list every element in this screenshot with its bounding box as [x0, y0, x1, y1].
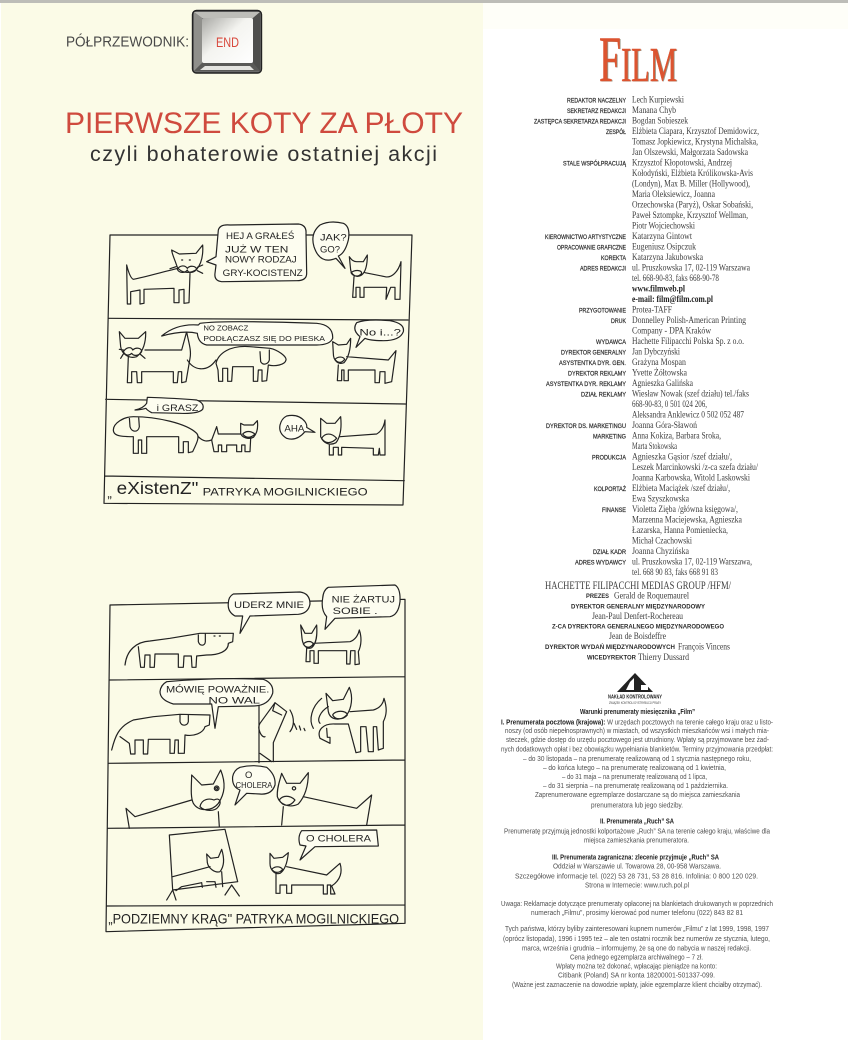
icon: END key: [192, 10, 262, 73]
speech bubble: [233, 766, 275, 805]
masthead: role labels: FINANSE: [602, 507, 626, 514]
masthead: names: Orzechowska (Paryż), Oskar Sobański,: [632, 199, 753, 210]
subscription terms text: Tych państwa, którzy byliby zainteresowani kupnem numerów „Filmu” z lat 1999, 1998, 1997: [505, 924, 769, 933]
speech bubble: NO WAL: [208, 696, 260, 706]
subscription terms text: noszy (od osób niepełnosprawnych) w miastach, od wszystkich mieszkańców wsi i małych mia-: [505, 726, 769, 735]
speech bubble: NO ZOBACZ: [203, 323, 249, 332]
masthead: role labels: PRZYGOTOWANIE: [579, 307, 626, 314]
publisher group block: Gerald de Roquemaurel: [614, 590, 689, 602]
subscription terms text: Prenumeratę przyjmują jednostki kolportażowe „Ruch” SA na terenie całego kraju, właściwe dla: [504, 826, 771, 835]
speech bubble: CHOLERA: [236, 781, 273, 790]
panel 2: punch: [112, 679, 386, 762]
panel 1: cat speaks: [127, 222, 401, 304]
masthead: names: ul. Pruszkowska 17, 02-119 Warszawa: [632, 262, 751, 273]
masthead: role labels: OPRACOWANIE GRAFICZNE: [557, 244, 626, 251]
subscription terms text: Szczegółowe informacje tel. (022) 53 28 731, 53 28 816. Infolinia: 0 800 120 029.: [515, 871, 758, 880]
subscription terms text: Oddział w Warszawie ul. Towarowa 28, 00-958 Warszawa.: [553, 862, 721, 871]
masthead: names: Tomasz Jopkiewicz, Krystyna Michalska,: [632, 136, 758, 147]
subscription terms text: steczek, gdzie dostęp do urzędu pocztowego jest utrudniony. Wpłaty są przyjmowane bez żad-: [506, 735, 769, 744]
masthead: names: tel. 668-90-83, faks 668-90-78: [632, 273, 719, 284]
subscription terms text: prenumeratora lub jego siedziby.: [591, 800, 683, 809]
masthead: role labels: DYREKTOR GENERALNY: [561, 349, 627, 356]
subscription terms text: – do końca lutego – na prenumeratę realizowaną od 1 kwietnia,: [543, 763, 726, 772]
masthead: names: www.filmweb.pl: [632, 283, 685, 294]
panel 3: o cholera: [126, 766, 372, 828]
speech bubble: O CHOLERA: [306, 834, 372, 844]
header: section label and END key: [66, 10, 262, 73]
publisher group block: DYREKTOR WYDAŃ MIĘDZYNARODOWYCH: [545, 642, 675, 651]
masthead: names: [632, 94, 759, 578]
publisher group block: Jean-Paul Denfert-Rochereau: [592, 611, 683, 622]
masthead: names: Agnieszka Galińska: [632, 378, 694, 389]
subscription terms text: Zaprenumerowane egzemplarze dostarczane są do miejsca zamieszkania: [535, 790, 741, 799]
publisher group block: Jean de Boisdeffre: [609, 631, 666, 642]
masthead: names: Donnelley Polish-American Printing: [632, 315, 746, 326]
subscription terms text: III. Prenumerata zagraniczna: zlecenie przyjmuje „Ruch” SA: [552, 852, 719, 861]
speech bubble: GRY-KOCISTENZ: [223, 268, 303, 278]
masthead: names: Joanna Góra-Sławoń: [632, 420, 697, 431]
masthead: names: tel. 668 90 83, faks 668 91 83: [632, 567, 718, 578]
subscription terms text: Strona w Internecie: www.ruch.pol.pl: [585, 880, 689, 889]
logo: FILM: F: [599, 24, 621, 96]
masthead: names: Joanna Karbowska, Witold Laskowski: [632, 472, 750, 483]
masthead: role labels: MARKETING: [593, 433, 626, 440]
speech bubble: [160, 679, 273, 728]
panel 2: cat plugged into dog: [119, 320, 403, 383]
masthead: names: Yvette Żółtowska: [632, 366, 688, 378]
masthead: role labels: KOREKTA: [601, 255, 627, 262]
masthead: names: Elżbieta Maciążek /szef działu/,: [632, 483, 730, 494]
caption: [107, 478, 368, 500]
masthead: names: Violetta Zięba /główna księgowa/,: [632, 504, 738, 515]
publisher group block: HACHETTE FILIPACCHI MEDIAS GROUP /HFM/: [545, 580, 732, 592]
masthead: names: Company - DPA Kraków: [632, 325, 711, 336]
masthead: role labels: WYDAWCA: [596, 339, 627, 346]
icon: circulation control seal: ZWIĄZEK KONTROLI DYSTRYBUCJI PRASY: [609, 701, 661, 705]
masthead: role labels: ASYSTENTKA DYR. GEN.: [559, 360, 626, 367]
masthead: role labels: SEKRETARZ REDAKCJI: [567, 108, 626, 115]
masthead: role labels: DZIAŁ REKLAMY: [581, 391, 627, 398]
speech bubble: i GRASZ: [157, 403, 199, 413]
caption: eXistenZ": [117, 478, 198, 498]
masthead: names: Lech Kurpiewski: [632, 94, 684, 105]
publisher group block: [545, 580, 732, 663]
masthead: names: Katarzyna Jakubowska: [632, 252, 704, 263]
speech bubble: GO?: [320, 244, 340, 254]
comic frame: [104, 235, 412, 505]
subscription terms text: nych dodatkowych opłat i bez obowiązku wypełniania blankietów. Terminy przyjmowania przedpłat:: [501, 745, 773, 754]
comic strip: eXistenZ: [104, 222, 412, 505]
publisher group block: WICEDYREKTOR: [587, 654, 636, 662]
speech bubble: NIE ŻARTUJ: [332, 594, 395, 604]
subscription terms text: numerach „Filmu”, prosimy kierować pod numer telefonu (022) 843 82 81: [531, 908, 743, 917]
logo: FILM: ILM: [621, 37, 677, 92]
subscription terms text: miejsca zamieszkania prenumeratora.: [584, 836, 689, 845]
masthead: names: Manana Chyb: [632, 105, 676, 116]
masthead: names: 668-90-83, 0 501 024 206,: [632, 399, 707, 410]
icon: END key: END: [216, 35, 239, 50]
speech bubble: [322, 585, 400, 629]
masthead: role labels: ZESPÓŁ: [606, 127, 626, 136]
masthead: role labels: DYREKTOR DS. MARKETINGU: [546, 423, 626, 430]
icon: circulation control seal: [608, 673, 663, 705]
subscription terms text: (oprócz listopada), 1996 i 1995 też – ale ten ostatni rocznik bez numerów ze stycznia, lutego,: [503, 934, 770, 943]
subscription terms text: Warunki prenumeraty miesięcznika „Film”: [580, 707, 695, 716]
subtitle: czyli bohaterowie ostatniej akcji: [90, 142, 437, 166]
masthead: role labels: ZASTĘPCA SEKRETARZA REDAKCJI: [534, 118, 626, 125]
publisher group block: François Vincens: [678, 642, 730, 652]
caption: „PODZIEMNY KRĄG" PATRYKA MOGILNICKIEGO: [108, 910, 399, 926]
masthead: role labels: DZIAŁ KADR: [593, 549, 626, 556]
subscription terms text: [501, 707, 773, 989]
publisher group block: Thierry Dussard: [638, 652, 689, 663]
masthead: role labels: DYREKTOR REKLAMY: [568, 370, 627, 377]
publisher group block: DYREKTOR GENERALNY MIĘDZYNARODOWY: [571, 604, 706, 610]
speech bubble: [313, 222, 349, 268]
icon: circulation control seal: NAKŁAD KONTROLOWANY: [608, 694, 663, 700]
masthead: names: Agnieszka Gąsior /szef działu/,: [632, 451, 732, 462]
masthead: names: e-mail: film@film.com.pl: [632, 294, 713, 305]
caption: PATRYKA MOGILNICKIEGO: [203, 486, 368, 498]
publisher group block: PREZES: [586, 593, 610, 600]
comic strip: Podziemny krąg: [106, 585, 405, 932]
masthead: names: Marzenna Maciejewska, Agnieszka: [632, 514, 743, 525]
masthead: role labels: ADRES WYDAWCY: [575, 559, 627, 566]
masthead: role labels: REDAKTOR NACZELNY: [567, 97, 627, 104]
panel 3: dog plays cat: [113, 397, 385, 455]
subscription terms text: – do 31 sierpnia – na prenumeratę realizowaną od 1 października.: [543, 781, 728, 790]
speech bubble: [207, 224, 307, 282]
speech bubble: MÓWIĘ POWAŻNIE.: [166, 685, 269, 695]
masthead: role labels: STALE WSPÓŁPRACUJĄ: [563, 158, 627, 167]
panel: cream left page: [1, 3, 483, 1040]
masthead: role labels: PRODUKCJA: [592, 454, 627, 461]
title: PIERWSZE KOTY ZA PŁOTY: [65, 107, 463, 140]
masthead: names: Jan Dybczyński: [632, 346, 680, 357]
speech bubble: JUŻ W TEN: [225, 244, 288, 254]
masthead: role labels: ADRES REDAKCJI: [580, 265, 626, 272]
masthead: role labels: KIEROWNICTWO ARTYSTYCZNE: [545, 234, 626, 241]
panel 1: dog and cat: [125, 585, 400, 667]
masthead: role labels: DRUK: [611, 318, 627, 325]
logo: FILM: [599, 24, 678, 96]
masthead: names: ul. Pruszkowska 17, 02-119 Warszawa,: [632, 556, 752, 567]
speech bubble: No i...?: [359, 327, 401, 337]
speech bubble: [162, 322, 333, 345]
masthead: names: Ewa Szyszkowska: [632, 493, 690, 504]
subscription terms text: II. Prenumerata „Ruch” SA: [600, 817, 674, 826]
subscription terms text: Cena jednego egzemplarza archiwalnego – 7 zł.: [570, 952, 703, 961]
speech bubble: [228, 592, 310, 633]
masthead: names: Piotr Wojciechowski: [632, 220, 695, 231]
speech bubble: AHA: [284, 424, 305, 434]
masthead: names: Wiesław Nowak (szef działu) tel./faks: [632, 388, 749, 399]
masthead: names: Aleksandra Anklewicz 0 502 052 487: [632, 409, 744, 420]
speech bubble: [355, 320, 403, 347]
comic frame: [106, 599, 405, 932]
speech bubble: O: [245, 770, 252, 780]
section label: PÓŁPRZEWODNIK:: [66, 34, 189, 51]
masthead: names: Anna Kokiza, Barbara Sroka,: [632, 430, 721, 441]
caption: „: [107, 485, 112, 500]
masthead: names: Katarzyna Gintowt: [632, 231, 692, 242]
masthead: role labels: [534, 97, 627, 566]
masthead: names: Eugeniusz Osipczuk: [632, 241, 696, 252]
masthead: names: Elżbieta Ciapara, Krzysztof Demidowicz,: [632, 126, 759, 137]
subscription terms text: Wpłaty można też dokonać, wpłacając pieniądze na konto:: [556, 961, 717, 970]
masthead: names: Grażyna Mospan: [632, 357, 686, 368]
speech bubble: [299, 830, 378, 860]
subscription terms text: (Ważne jest zaznaczenie na dowodzie wpłaty, jakie egzemplarze klient chciałby otrzymać).: [512, 980, 762, 989]
masthead: role labels: ASYSTENTKA DYR. REKLAMY: [546, 381, 627, 388]
masthead: names: Michał Czachowski: [632, 535, 692, 546]
subscription terms text: I. Prenumerata pocztowa (krajowa): W urzędach pocztowych na terenie całego kraju oraz u listo-: [501, 717, 773, 726]
masthead: names: Krzysztof Kłopotowski, Andrzej: [632, 157, 732, 168]
masthead: names: Leszek Marcinkowski /z-ca szefa działu/: [632, 462, 758, 473]
masthead: names: Paweł Sztompke, Krzysztof Wellman,: [632, 210, 748, 221]
masthead: names: Marta Stokowska: [632, 441, 677, 452]
subscription terms text: Citibank (Poland) SA nr konta 18200001-501337-099.: [558, 971, 715, 980]
masthead: names: Bogdan Sobieszek: [632, 115, 688, 126]
subscription terms text: marca, września i grudnia – informujemy, że są one do nabycia w naszej redakcji.: [522, 943, 751, 952]
speech bubble: [280, 415, 315, 439]
speech bubble: NOWY RODZAJ: [225, 255, 297, 265]
speech bubble: HEJ A GRAŁEŚ: [226, 230, 294, 241]
publisher group block: Z-CA DYREKTORA GENERALNEGO MIĘDZYNARODOWEGO: [552, 624, 724, 630]
speech bubble: [135, 397, 203, 413]
subscription terms text: – do 30 listopada – na prenumeratę realizowaną od 1 stycznia następnego roku,: [523, 754, 751, 763]
subscription terms text: – do 31 maja – na prenumeratę realizowaną od 1 lipca,: [562, 772, 707, 781]
masthead: names: Kołodyński, Elżbieta Królikowska-Avis: [632, 168, 753, 179]
masthead: names: Joanna Chyzińska: [632, 546, 690, 557]
panel 4: screen and cat: [167, 829, 378, 900]
speech bubble: UDERZ MNIE: [234, 600, 304, 610]
masthead: role labels: KOLPORTAŻ: [594, 484, 626, 493]
masthead: names: Protea-TAFF: [632, 304, 672, 315]
speech bubble: SOBIE .: [333, 606, 378, 616]
speech bubble: JAK?: [320, 233, 347, 243]
masthead: names: (Londyn), Max B. Miller (Hollywood),: [632, 178, 750, 189]
logo: FILM: F: [600, 24, 622, 96]
logo: FILM: ILM: [622, 38, 678, 92]
masthead: names: Maria Oleksiewicz, Joanna: [632, 189, 716, 200]
masthead: names: Hachette Filipacchi Polska Sp. z o.o.: [632, 336, 744, 347]
speech bubble: PODŁĄCZASZ SIĘ DO PIESKA: [203, 334, 326, 343]
masthead: names: Łazarska, Hanna Pomieniecka,: [632, 525, 728, 536]
subscription terms text: Uwaga: Reklamacje dotyczące prenumeraty opłaconej na blankietach drukowanych w poprzednich: [501, 899, 773, 908]
masthead: names: Jan Olszewski, Małgorzata Sadowska: [632, 147, 749, 158]
